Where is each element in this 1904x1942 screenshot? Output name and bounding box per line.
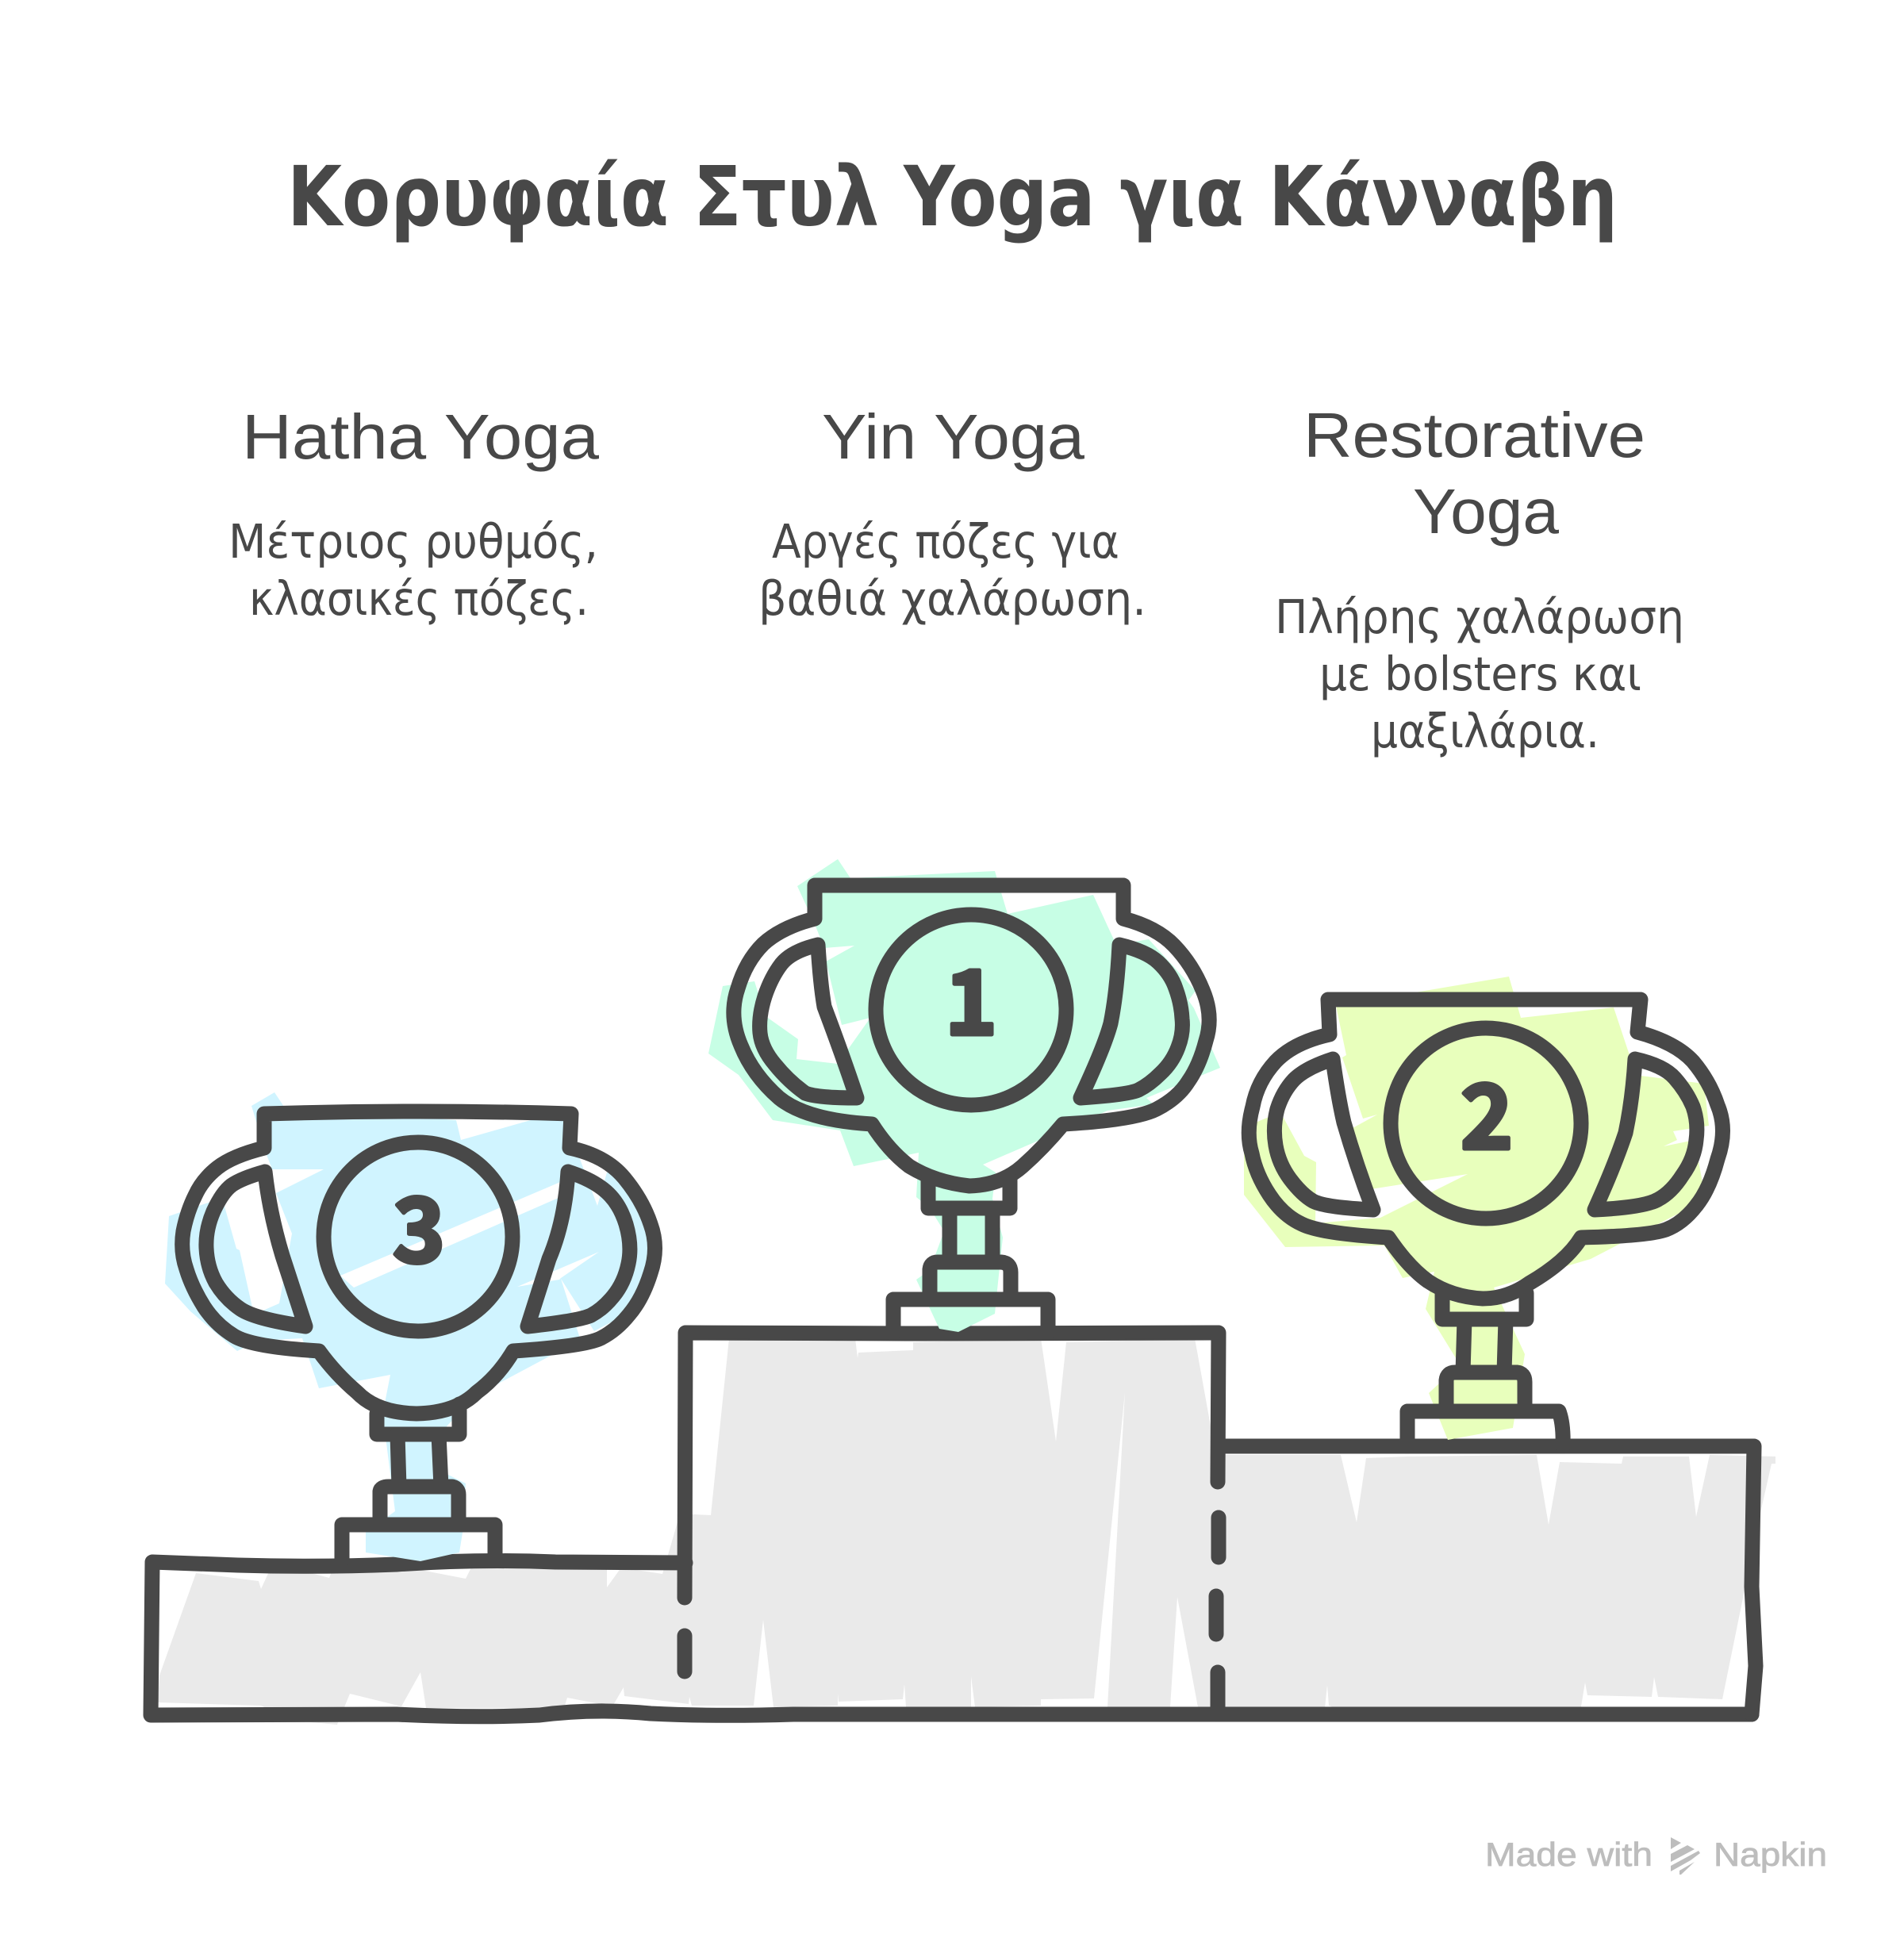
description: Restorative Yoga	[1275, 589, 1684, 758]
description: Hatha Yoga: κλασικές πόζες.	[249, 571, 589, 626]
podium outlines and dashes	[151, 1333, 1756, 1717]
description: Hatha Yoga: Μέτριος ρυθμός,	[228, 514, 598, 569]
podium grey sketch fill	[158, 1338, 1775, 1725]
title: Κορυφαία Στυλ Yoga για Κάνναβη	[287, 148, 1618, 245]
cup colour fill	[1244, 977, 1709, 1440]
description: Restorative Yoga: μαξιλάρια.	[1371, 704, 1599, 758]
heading: Restorative Yoga: Restorative	[1303, 400, 1645, 470]
heading: Restorative Yoga	[1303, 400, 1645, 547]
heading: Restorative Yoga: Yoga	[1413, 476, 1560, 547]
panel: Hatha Yoga text	[228, 401, 600, 626]
panel: Restorative Yoga text	[1275, 400, 1684, 758]
trophy 1: Yin Yoga	[708, 859, 1220, 1333]
medal circle	[324, 1142, 512, 1331]
cup colour fill	[708, 859, 1220, 1332]
trophy 2: Restorative Yoga	[1244, 977, 1723, 1446]
description: Restorative Yoga: με bolsters και	[1319, 647, 1641, 701]
rank number 3: 3	[393, 1160, 445, 1288]
description: Restorative Yoga: Πλήρης χαλάρωση	[1275, 589, 1684, 644]
cup outline	[734, 885, 1209, 1333]
description: Hatha Yoga	[228, 514, 598, 626]
cup outline	[1249, 1000, 1723, 1446]
icon: Napkin logo	[1671, 1837, 1700, 1875]
medal circle	[876, 915, 1066, 1105]
trophy 3: Hatha Yoga	[165, 1092, 658, 1561]
rank number 1: 1	[945, 932, 997, 1061]
white highlight strokes	[340, 1178, 599, 1341]
watermark: Made with Napkin	[1485, 1836, 1827, 1875]
watermark text: Made with: Made with	[1485, 1836, 1653, 1873]
panel: Yin Yoga text	[758, 401, 1146, 626]
watermark text: Napkin: Napkin	[1714, 1836, 1827, 1873]
description: Yin Yoga: Αργές πόζες για	[772, 514, 1119, 569]
description: Yin Yoga: βαθιά χαλάρωση.	[758, 571, 1146, 626]
cup colour fill	[165, 1092, 658, 1561]
heading: Yin Yoga: Yin Yoga	[822, 401, 1085, 472]
podium	[151, 1333, 1775, 1725]
medal circle	[1391, 1028, 1581, 1219]
rank number 2: 2	[1461, 1046, 1513, 1175]
heading: Hatha Yoga: Hatha Yoga	[242, 401, 600, 472]
description: Yin Yoga	[758, 514, 1146, 626]
cup outline	[182, 1111, 654, 1560]
